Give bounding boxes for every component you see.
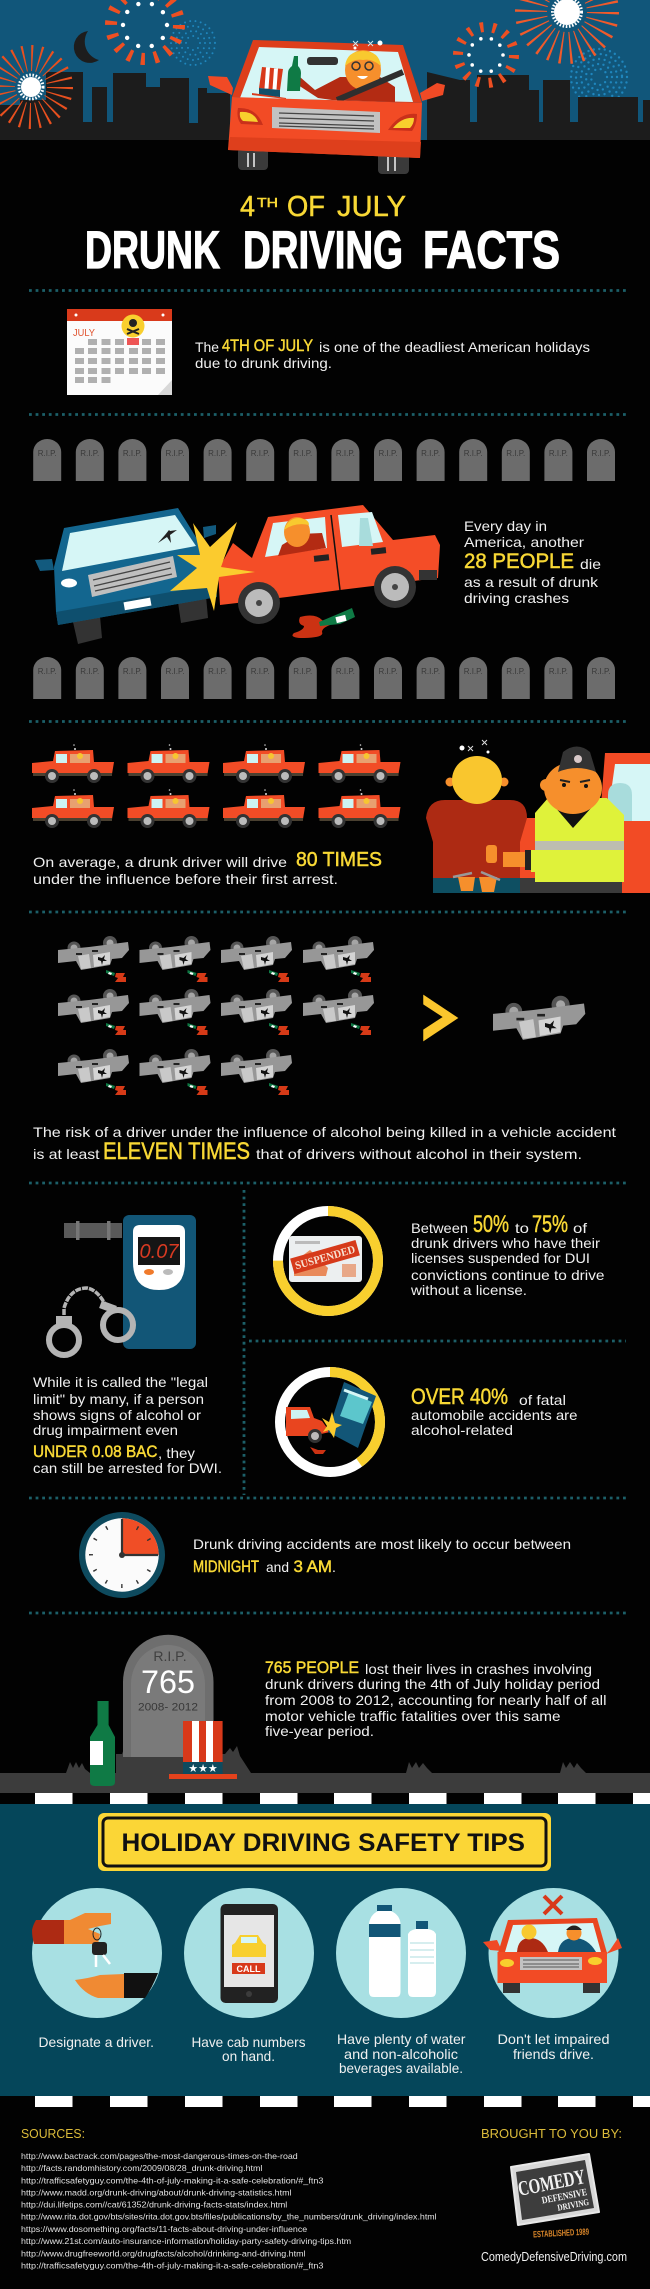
text: 50 to 75 percent: of	[573, 1220, 587, 1236]
firework: top right burst	[531, 0, 603, 48]
tombstone row one: R.I.P.	[379, 449, 397, 458]
sponsor logo: DRIVING	[556, 2197, 590, 2213]
tombstone row one: R.I.P.	[464, 449, 483, 458]
text: 28 people: as a result of drunk	[464, 574, 599, 590]
title line one: OF	[287, 191, 325, 223]
icon: handcuffs	[49, 1288, 133, 1355]
tombstone row one: R.I.P.	[208, 449, 227, 458]
text: legal limit: shows signs of alcohol or	[33, 1407, 201, 1423]
tombstone row one: R.I.P.	[592, 449, 610, 458]
hat stars: ★★★	[188, 1762, 218, 1775]
text: over 40 percent: automobile accidents are	[411, 1407, 578, 1423]
eleven overturned cars	[58, 936, 374, 1095]
driver	[298, 50, 403, 102]
calendar day squares	[75, 339, 165, 383]
title line two: DRIVING	[243, 221, 403, 280]
tombstone row one: R.I.P.	[421, 449, 440, 458]
firework: red and white right	[458, 27, 514, 83]
title line one: 4	[240, 191, 255, 223]
tombstone row one: R.I.P.	[80, 449, 99, 458]
side mirrors	[208, 76, 445, 101]
sources list: http://www.21st.com/auto-insurance-information/holiday-party-safety-driving-tips.htm	[21, 2236, 351, 2246]
tombstone row two: R.I.P.	[251, 667, 270, 676]
tombstone row one: R.I.P.	[166, 449, 184, 458]
beer bottle	[287, 56, 301, 91]
green bottle	[90, 1701, 115, 1786]
text: deadliest holidays: due to drunk driving.	[195, 355, 332, 371]
text: legal limit	[33, 1374, 222, 1476]
header night sky	[0, 0, 650, 140]
tombstone row two: R.I.P.	[336, 667, 355, 676]
text: 50 to 75 percent: licenses suspended for DUI	[411, 1250, 590, 1266]
sponsor heading: BROUGHT TO YOU BY:	[481, 2126, 622, 2141]
text: midnight to 3 am: .	[332, 1559, 336, 1575]
tip captions: Have plenty of water	[337, 2031, 466, 2047]
firework: blue dots left	[171, 21, 215, 65]
tombstone row two: R.I.P.	[549, 667, 568, 676]
grille	[272, 107, 380, 133]
text: 765 people	[265, 1658, 606, 1739]
text: 80 times	[33, 849, 382, 887]
tombstone row two: R.I.P.	[379, 667, 397, 676]
title	[85, 191, 560, 280]
tombstone row one: R.I.P.	[251, 449, 270, 458]
tombstone row two: R.I.P.	[592, 667, 610, 676]
text: eleven times: that of drivers without alcohol in their system.	[256, 1146, 582, 1162]
sources list: http://www.rita.dot.gov/bts/sites/rita.dot.gov.bts/files/publications/by_the_numbers/drunk_driving/index.html	[21, 2212, 437, 2222]
text: 80 times: On average, a drunk driver will drive	[33, 854, 287, 870]
tombstone row two: R.I.P.	[38, 667, 57, 676]
title line one: JULY	[337, 191, 406, 223]
tombstone row two: R.I.P.	[506, 667, 525, 676]
sponsor logo: DEFENSIVE	[541, 2187, 588, 2207]
text: 50 to 75 percent: drunk drivers who have their	[411, 1235, 600, 1251]
tip captions: and non-alcoholic	[344, 2046, 458, 2062]
broken bottle	[319, 608, 355, 626]
call button: CALL	[236, 1964, 261, 1974]
text: legal limit: UNDER 0.08 BAC	[33, 1442, 158, 1461]
established tag: ESTABLISHED 1989	[533, 2227, 589, 2239]
breathalyzer reading: 0.07	[140, 1241, 179, 1263]
moon	[74, 31, 99, 63]
police officer	[503, 746, 624, 893]
wheels	[238, 148, 409, 174]
tombstone row one: R.I.P.	[506, 449, 525, 458]
chart: 40 percent ring with crash	[280, 1372, 380, 1472]
text: 765 people: motor vehicle traffic fatalities over this same	[265, 1708, 561, 1724]
text: eleven times: is at least	[33, 1146, 100, 1162]
text: deadliest holidays: 4TH OF JULY	[222, 336, 313, 355]
tombstone years: 2008- 2012	[138, 1702, 198, 1714]
title line two: FACTS	[423, 221, 560, 280]
sources heading: SOURCES:	[21, 2126, 85, 2141]
text: midnight to 3 am: MIDNIGHT	[193, 1557, 259, 1576]
tip captions: Designate a driver.	[38, 2034, 154, 2050]
eight small red cars	[32, 744, 400, 828]
tombstone row one: R.I.P.	[336, 449, 355, 458]
text: eleven times: The risk of a driver under the influence of alcohol being killed in a vehicle accident	[33, 1124, 616, 1140]
sign heading: HOLIDAY DRIVING SAFETY TIPS	[122, 1829, 525, 1857]
logo wordmark: COMEDY	[516, 2164, 587, 2201]
title line two: DRUNK	[85, 221, 220, 280]
suspended stamp: SUSPENDED	[294, 1244, 357, 1272]
arrested driver	[426, 740, 527, 893]
icon: phone with cab	[184, 1888, 314, 2018]
firework: blue dots right	[571, 49, 627, 105]
road markings bottom	[35, 2096, 650, 2107]
tip captions: beverages available.	[339, 2060, 463, 2076]
text: midnight to 3 am: 3 AM	[294, 1557, 332, 1576]
sources list: http://trafficsafetyguy.com/the-4th-of-july-making-it-a-safe-celebration/#_ftn3	[21, 2175, 324, 2185]
text: 50 to 75 percent	[410, 1211, 605, 1298]
text: over 40 percent	[411, 1384, 578, 1438]
blue car	[35, 508, 217, 644]
sources list: http://www.drugfreeworld.org/drugfacts/alcohol/drinking-and-driving.html	[21, 2248, 306, 2258]
text: eleven times: ELEVEN TIMES	[103, 1138, 250, 1165]
icon: calendar	[67, 309, 172, 395]
sign heading	[98, 1813, 551, 1871]
text: 28 people: driving crashes	[464, 590, 569, 606]
icon: breathalyzer	[64, 1215, 196, 1349]
text: 50 to 75 percent: convictions continue to drive	[411, 1267, 605, 1283]
text: 80 times: under the influence before their first arrest.	[33, 871, 338, 887]
tombstone row two: R.I.P.	[166, 667, 184, 676]
sponsor logo	[511, 2154, 599, 2239]
sources list: http://dui.lifetips.com//cat/61352/drunk-driving-facts-stats/index.html	[21, 2200, 287, 2210]
sources list	[21, 2151, 437, 2270]
text: over 40 percent: of fatal	[519, 1392, 566, 1408]
uncle sam hat	[169, 1721, 237, 1779]
road markings top	[35, 1793, 650, 1804]
text: 765 people: drunk drivers during the 4th of July holiday period	[265, 1676, 600, 1692]
tip captions: Don't let impaired	[498, 2031, 610, 2047]
city skyline	[0, 72, 650, 140]
tombstone row two: R.I.P.	[208, 667, 227, 676]
icon: handing over keys	[32, 1888, 162, 2018]
title line one: TH	[257, 195, 278, 210]
tombstone row two	[33, 657, 615, 699]
tombstone row one: R.I.P.	[549, 449, 568, 458]
tip captions: on hand.	[222, 2048, 275, 2064]
text: 765 people: from 2008 to 2012, accounting for nearly half of all	[265, 1692, 606, 1708]
text: midnight to 3 am	[193, 1536, 571, 1576]
tombstone row two: R.I.P.	[123, 667, 142, 676]
ground with grass	[0, 1746, 650, 1793]
windshield	[240, 47, 413, 102]
sources list: http://www.madd.org/drunk-driving/about/drunk-driving-statistics.html	[21, 2187, 292, 2197]
icon: water bottles	[336, 1888, 466, 2018]
text: legal limit: limit" by many, if a person	[33, 1391, 204, 1407]
text: legal limit: can still be arrested for DWI.	[33, 1460, 222, 1476]
tombstone number: 765	[141, 1664, 195, 1700]
single overturned car	[493, 996, 585, 1040]
tip captions: friends drive.	[513, 2046, 594, 2062]
calendar month label: JULY	[73, 328, 95, 339]
blue truck in ring	[328, 1382, 376, 1448]
headlights	[237, 108, 417, 131]
sources list: http://www.bactrack.com/pages/the-most-dangerous-times-on-the-road	[21, 2151, 298, 2161]
skull badge	[122, 314, 144, 338]
text: over 40 percent: OVER 40%	[411, 1384, 508, 1409]
tombstone row two: R.I.P.	[293, 667, 312, 676]
tombstone row one	[33, 439, 615, 481]
text: 50 to 75 percent: Between	[411, 1220, 468, 1236]
small red car in ring	[286, 1407, 330, 1443]
title line one	[240, 191, 406, 223]
text: deadliest holidays: is one of the deadliest American holidays	[319, 339, 590, 355]
text: legal limit: drug impairment even	[33, 1422, 178, 1438]
text: 28 people: America, another	[464, 534, 584, 550]
roof frame	[232, 40, 422, 103]
tombstone row two: R.I.P.	[421, 667, 440, 676]
sources list: http://facts.randomhistory.com/2009/08/28_drunk-driving.html	[21, 2163, 263, 2173]
tombstone row two: R.I.P.	[80, 667, 99, 676]
text: deadliest holidays: The	[195, 339, 219, 355]
uncle sam hat	[252, 67, 286, 99]
tombstone row one: R.I.P.	[38, 449, 57, 458]
car body	[228, 97, 422, 158]
impact star	[170, 522, 255, 611]
tombstone heading: R.I.P.	[153, 1648, 187, 1664]
text: eleven times	[33, 1124, 616, 1165]
big tombstone	[123, 1635, 214, 1757]
dizzy marks	[353, 40, 382, 50]
greater-than arrow	[424, 996, 457, 1040]
tip captions	[38, 2031, 610, 2076]
police vehicle	[520, 753, 650, 893]
text: midnight to 3 am: and	[266, 1559, 289, 1575]
icon: car with impaired friends	[483, 1888, 622, 2018]
text: 80 times: 80 TIMES	[296, 849, 382, 871]
title line two	[85, 221, 560, 280]
text: 50 to 75 percent: without a license.	[410, 1282, 527, 1298]
sources list: http://trafficsafetyguy.com/the-4th-of-july-making-it-a-safe-celebration/#_ftn3	[21, 2260, 324, 2270]
icon: clock	[79, 1512, 165, 1598]
arrest scene	[426, 740, 650, 893]
text: 50 to 75 percent: to	[515, 1220, 529, 1236]
text: 28 people	[464, 518, 601, 606]
text: legal limit: While it is called the "legal	[33, 1374, 208, 1390]
text: 50 to 75 percent: 75%	[532, 1211, 568, 1238]
chart: 75 percent ring with suspended licence	[278, 1211, 378, 1311]
impact star in ring	[322, 1412, 342, 1438]
tombstone row two: R.I.P.	[464, 667, 483, 676]
firework: red and white top left	[111, 0, 179, 59]
text: 50 to 75 percent: 50%	[473, 1211, 509, 1238]
tip captions: Have cab numbers	[192, 2034, 306, 2050]
text: 765 people: five-year period.	[265, 1723, 374, 1739]
panel: safety tips	[0, 1804, 650, 2096]
text: 765 people: 765 PEOPLE	[265, 1658, 359, 1677]
text: over 40 percent: alcohol-related	[411, 1422, 513, 1438]
text: 28 people: Every day in	[464, 518, 547, 534]
text: legal limit: , they	[158, 1445, 195, 1461]
sources list: https://www.dosomething.org/facts/11-facts-about-driving-under-influence	[21, 2224, 307, 2234]
tombstone row one: R.I.P.	[293, 449, 312, 458]
text: 28 people: 28 PEOPLE	[464, 550, 574, 573]
text: 28 people: die	[580, 556, 601, 572]
tombstone row one: R.I.P.	[123, 449, 142, 458]
firework: left burst	[2, 58, 60, 116]
rear-view mirror	[307, 57, 338, 65]
text: midnight to 3 am: Drunk driving accidents are most likely to occur between	[193, 1536, 571, 1552]
red car	[218, 505, 440, 624]
drunk driver car, front view	[208, 40, 445, 174]
text: 765 people: lost their lives in crashes involving	[365, 1661, 592, 1677]
spilled drink	[292, 616, 330, 638]
text: deadliest holidays	[195, 336, 590, 371]
crash scene	[35, 505, 440, 644]
